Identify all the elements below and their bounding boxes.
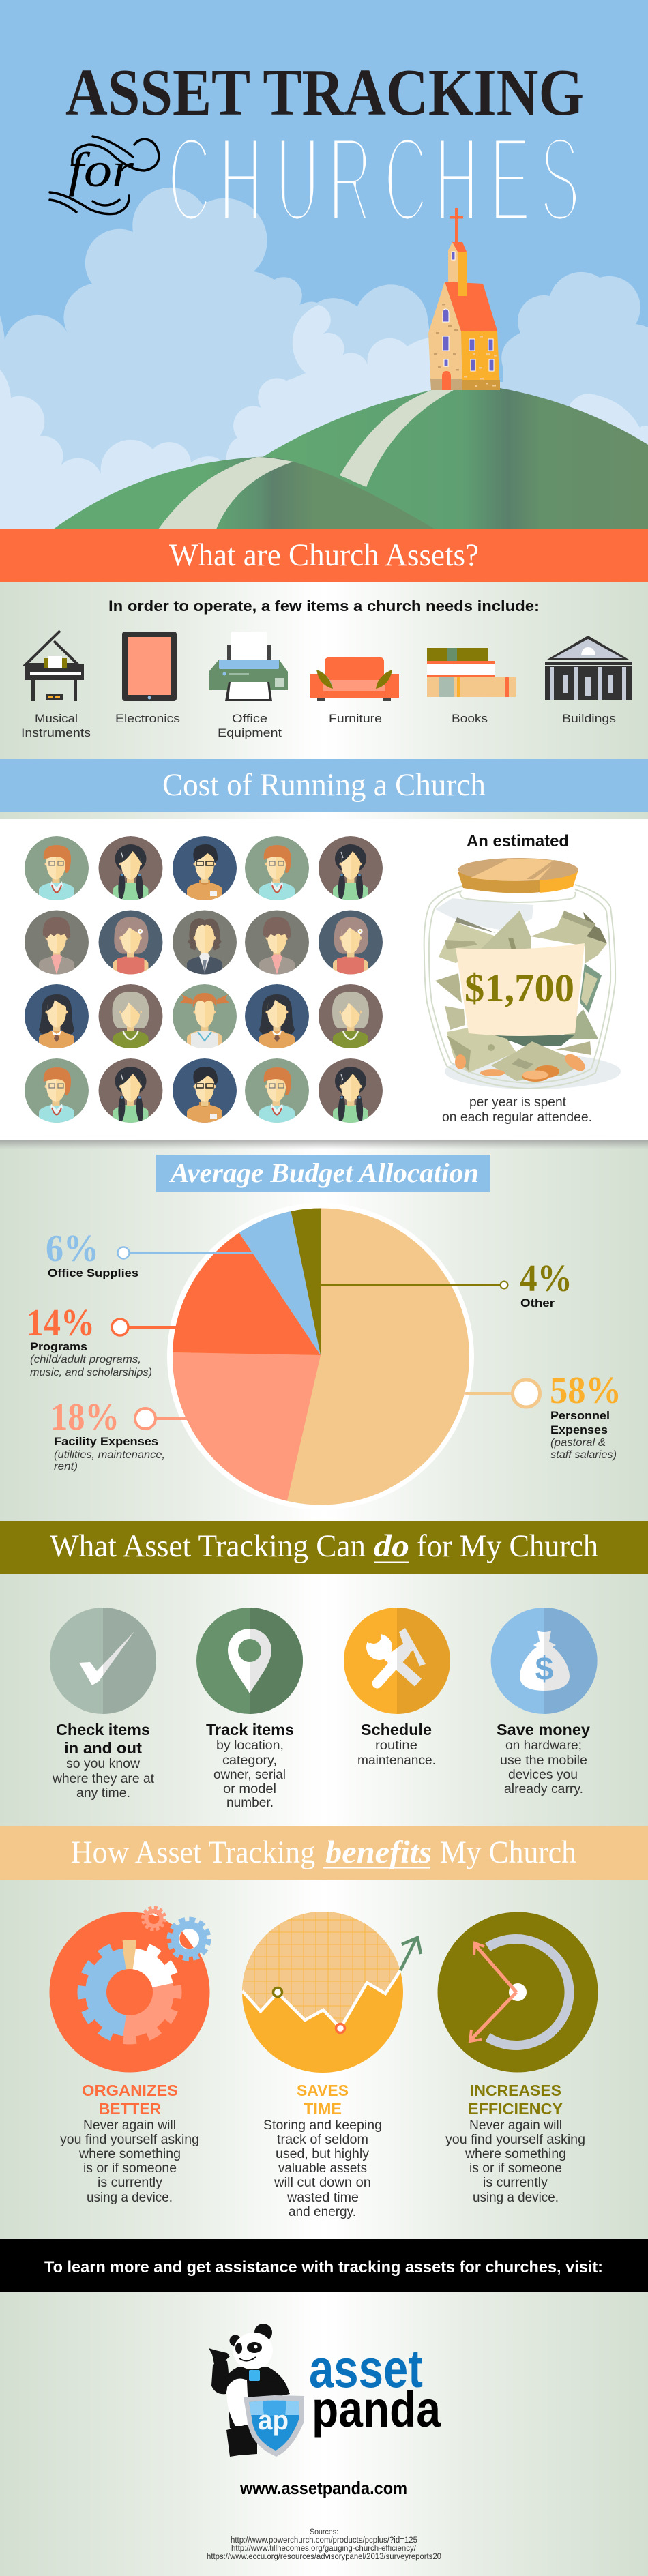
text: per year: per year is spent xyxy=(469,1095,567,1110)
section band: How Asset Tracking benefits: My Church xyxy=(440,1835,576,1870)
benefit: increases efficiency: is or if someone xyxy=(469,2161,562,2176)
section band: What are Church Assets: What are Church Assets? xyxy=(169,537,479,573)
title: for with swashes: for xyxy=(68,143,134,197)
feature: save money: already carry. xyxy=(504,1782,583,1796)
benefit: organizes better: you find yourself asking xyxy=(60,2133,199,2147)
clouds back layer xyxy=(0,188,648,529)
benefit: saves time: wasted time xyxy=(286,2191,359,2205)
feature: track items: Track items xyxy=(206,1721,294,1738)
sources: https://www.eccu.org/resources/advisorypanel/2013/surveyreports20 xyxy=(207,2553,441,2561)
benefit: organizes better: is or if someone xyxy=(83,2161,177,2176)
avatar grid xyxy=(25,836,383,1123)
bills xyxy=(455,917,496,933)
logo: asset panda xyxy=(209,2324,441,2457)
benefit: saves time: Storing and keeping xyxy=(263,2118,382,2133)
feature: check items: where they are at xyxy=(52,1772,155,1786)
benefit: increases efficiency: using a device. xyxy=(473,2191,559,2205)
asset labels: Equipment xyxy=(218,726,282,739)
icon: sofa xyxy=(310,657,399,701)
callout: other 4%: Other xyxy=(520,1297,555,1309)
callout: programs 14%: music, and scholarships) xyxy=(30,1367,152,1378)
benefit: organizes better: is currently xyxy=(98,2176,163,2190)
church xyxy=(428,208,500,390)
benefit: organizes better: Never again will xyxy=(83,2118,176,2133)
callout: personnel expenses 58%: staff salaries) xyxy=(550,1449,617,1461)
asset labels: Instruments xyxy=(21,726,91,739)
callout: other 4%: 4% xyxy=(520,1258,572,1300)
feature: track items: number. xyxy=(226,1796,274,1810)
icon: map pin xyxy=(228,1629,271,1693)
icon: clock xyxy=(470,1939,570,2045)
feature: schedule xyxy=(344,1608,450,1768)
icon: piano xyxy=(25,631,84,701)
feature: track items: owner, serial xyxy=(213,1768,286,1782)
text: an estimated: An estimated xyxy=(467,832,569,850)
benefit: saves time: and energy. xyxy=(289,2205,356,2219)
icon: printer xyxy=(209,632,288,701)
asset labels: Buildings xyxy=(562,712,616,725)
feature: track items: by location, xyxy=(216,1738,284,1753)
feature: save money: devices you xyxy=(508,1768,578,1782)
icon: shield xyxy=(244,2395,304,2457)
icon: money jar xyxy=(424,858,621,1089)
callout: programs 14% xyxy=(27,1302,176,1378)
callout: facility expenses 18% xyxy=(50,1396,188,1472)
feature: schedule: Schedule xyxy=(361,1721,432,1738)
icon: small blue gear xyxy=(169,1919,209,1959)
benefit: saves time xyxy=(239,1910,421,2219)
icon: large gear xyxy=(78,1940,181,2045)
title: Asset Tracking: ASSET TRACKING xyxy=(65,56,584,130)
heading: Average Budget Allocation: Average Budget Allocation xyxy=(168,1157,479,1188)
feature: check items: so you know xyxy=(66,1757,140,1771)
call to action band: To learn more and get assistance with tracking assets for churches, visit: xyxy=(44,2258,603,2277)
callout: facility expenses 18%: rent) xyxy=(54,1461,78,1472)
benefit: increases efficiency: Never again will xyxy=(469,2118,562,2133)
callout: personnel expenses 58%: 58% xyxy=(550,1370,621,1412)
section band: Cost of Running a Church xyxy=(0,759,648,812)
feature: save money xyxy=(491,1608,598,1796)
callout: office supplies 6%: 6% xyxy=(46,1228,99,1270)
asset labels xyxy=(21,712,616,739)
section band: What are Church Assets xyxy=(0,529,648,582)
text: per year: on each regular attendee. xyxy=(442,1110,592,1125)
website url: www.assetpanda.com xyxy=(239,2478,407,2498)
benefit: increases efficiency: EFFICIENCY xyxy=(468,2100,563,2118)
asset labels: Books xyxy=(452,712,488,725)
benefit: increases efficiency: INCREASES xyxy=(470,2082,561,2099)
asset labels: Musical xyxy=(35,712,78,725)
benefit: saves time: TIME xyxy=(304,2100,342,2118)
asset labels: Office xyxy=(232,712,267,725)
text: $1,700: $1,700 xyxy=(465,966,574,1010)
callout: personnel expenses 58%: Expenses xyxy=(550,1423,608,1436)
benefit: saves time: used, but highly xyxy=(276,2147,370,2161)
big hill xyxy=(205,387,648,529)
feature: save money: on hardware; xyxy=(505,1738,582,1753)
callout: personnel expenses 58% xyxy=(465,1370,621,1461)
callout: programs 14%: (child/adult programs, xyxy=(30,1354,141,1365)
callout: personnel expenses 58%: (pastoral & xyxy=(550,1437,606,1449)
feature: save money: Save money xyxy=(497,1721,590,1738)
lid xyxy=(458,870,578,893)
sources: http://www.powerchurch.com/products/pcplus/?id=125 xyxy=(231,2536,417,2545)
label xyxy=(456,943,585,1036)
callout: personnel expenses 58%: Personnel xyxy=(550,1409,610,1422)
sources: Sources: xyxy=(310,2528,338,2536)
feature: save money: use the mobile xyxy=(500,1753,587,1768)
benefit: increases efficiency xyxy=(438,1912,598,2205)
feature: track items: category, xyxy=(222,1753,277,1768)
feature: check items: Check items xyxy=(56,1721,150,1738)
chart: rising line xyxy=(239,1910,421,2032)
road on small hill xyxy=(158,457,293,529)
callout: office supplies 6% xyxy=(46,1228,253,1279)
icon: money bag xyxy=(520,1631,570,1691)
pie chart xyxy=(167,1209,474,1505)
text: per year xyxy=(442,1095,592,1125)
callout: other 4% xyxy=(321,1258,572,1309)
benefit: saves time: SAVES xyxy=(297,2082,349,2099)
benefit: saves time: valuable assets xyxy=(278,2161,367,2176)
section band: What Asset Tracking Can do xyxy=(0,1521,648,1574)
feature: check items: in and out xyxy=(64,1739,142,1757)
jar glass outline xyxy=(424,885,615,1089)
icon: wrench and hammer xyxy=(362,1627,426,1683)
benefit: organizes better: where something xyxy=(78,2147,181,2161)
panel: cost of running xyxy=(0,819,648,1149)
benefit: organizes better: using a device. xyxy=(87,2191,173,2205)
section band: How Asset Tracking benefits: benefits xyxy=(325,1835,432,1870)
icon: tablet xyxy=(122,632,177,701)
callout: programs 14%: Programs xyxy=(30,1340,87,1353)
benefit: saves time: will cut down on xyxy=(274,2176,371,2190)
icon: small salmon gear xyxy=(143,1908,165,1929)
feature: check items: any time. xyxy=(76,1786,130,1801)
asset labels: Furniture xyxy=(329,712,382,725)
benefit: organizes better: ORGANIZES xyxy=(82,2082,178,2099)
benefit: saves time: track of seldom xyxy=(277,2133,368,2147)
feature: schedule: routine xyxy=(375,1738,417,1753)
section band: What Asset Tracking Can do: for My Church xyxy=(417,1528,598,1564)
road on big hill xyxy=(340,390,454,487)
section band: Cost of Running a Church: Cost of Running a Church xyxy=(162,767,486,803)
logo: asset panda: panda xyxy=(312,2381,441,2438)
section band: What Asset Tracking Can do: What Asset Tracking Can xyxy=(50,1528,366,1564)
benefit: organizes better: BETTER xyxy=(99,2100,161,2118)
callout: office supplies 6%: Office Supplies xyxy=(48,1267,138,1279)
feature: schedule: maintenance. xyxy=(357,1753,436,1768)
icon: books xyxy=(427,648,516,697)
call to action band xyxy=(0,2239,648,2292)
hero illustration xyxy=(0,0,648,529)
callout: facility expenses 18%: (utilities, maintenance, xyxy=(54,1449,165,1461)
callout: facility expenses 18%: 18% xyxy=(50,1396,119,1438)
title: Churches: CHURCHES xyxy=(168,111,580,247)
feature: check items xyxy=(50,1608,156,1801)
wordmark: asset xyxy=(309,2338,423,2399)
section band: What Asset Tracking Can do: do xyxy=(374,1528,409,1564)
intro text: In order to operate, a few items a church needs include: xyxy=(108,597,540,615)
callout: facility expenses 18%: Facility Expenses xyxy=(54,1435,158,1448)
section band: How Asset Tracking benefits: How Asset Tracking xyxy=(71,1835,315,1870)
icon: building xyxy=(545,636,632,700)
clouds front layer xyxy=(0,305,437,529)
feature: track items xyxy=(196,1608,303,1810)
small hill xyxy=(53,457,435,529)
icon: shield: ap xyxy=(258,2405,289,2436)
coins xyxy=(455,1054,466,1069)
asset labels: Electronics xyxy=(115,712,180,725)
title: for with swashes xyxy=(50,136,159,214)
sources xyxy=(207,2528,441,2561)
icon: panda mascot xyxy=(209,2324,290,2457)
icon: check mark xyxy=(79,1631,134,1685)
callout: programs 14%: 14% xyxy=(27,1302,95,1344)
benefit: increases efficiency: you find yourself asking xyxy=(445,2133,585,2147)
benefit: organizes better xyxy=(49,1908,210,2205)
benefit: increases efficiency: is currently xyxy=(483,2176,548,2190)
feature: track items: or model xyxy=(223,1782,276,1796)
icon: money bag: $ xyxy=(535,1651,554,1687)
sources: http://www.tillhecomes.org/gauging-church-efficiency/ xyxy=(231,2545,417,2553)
section band: How Asset Tracking benefits xyxy=(0,1826,648,1880)
benefit: increases efficiency: where something xyxy=(465,2147,566,2161)
